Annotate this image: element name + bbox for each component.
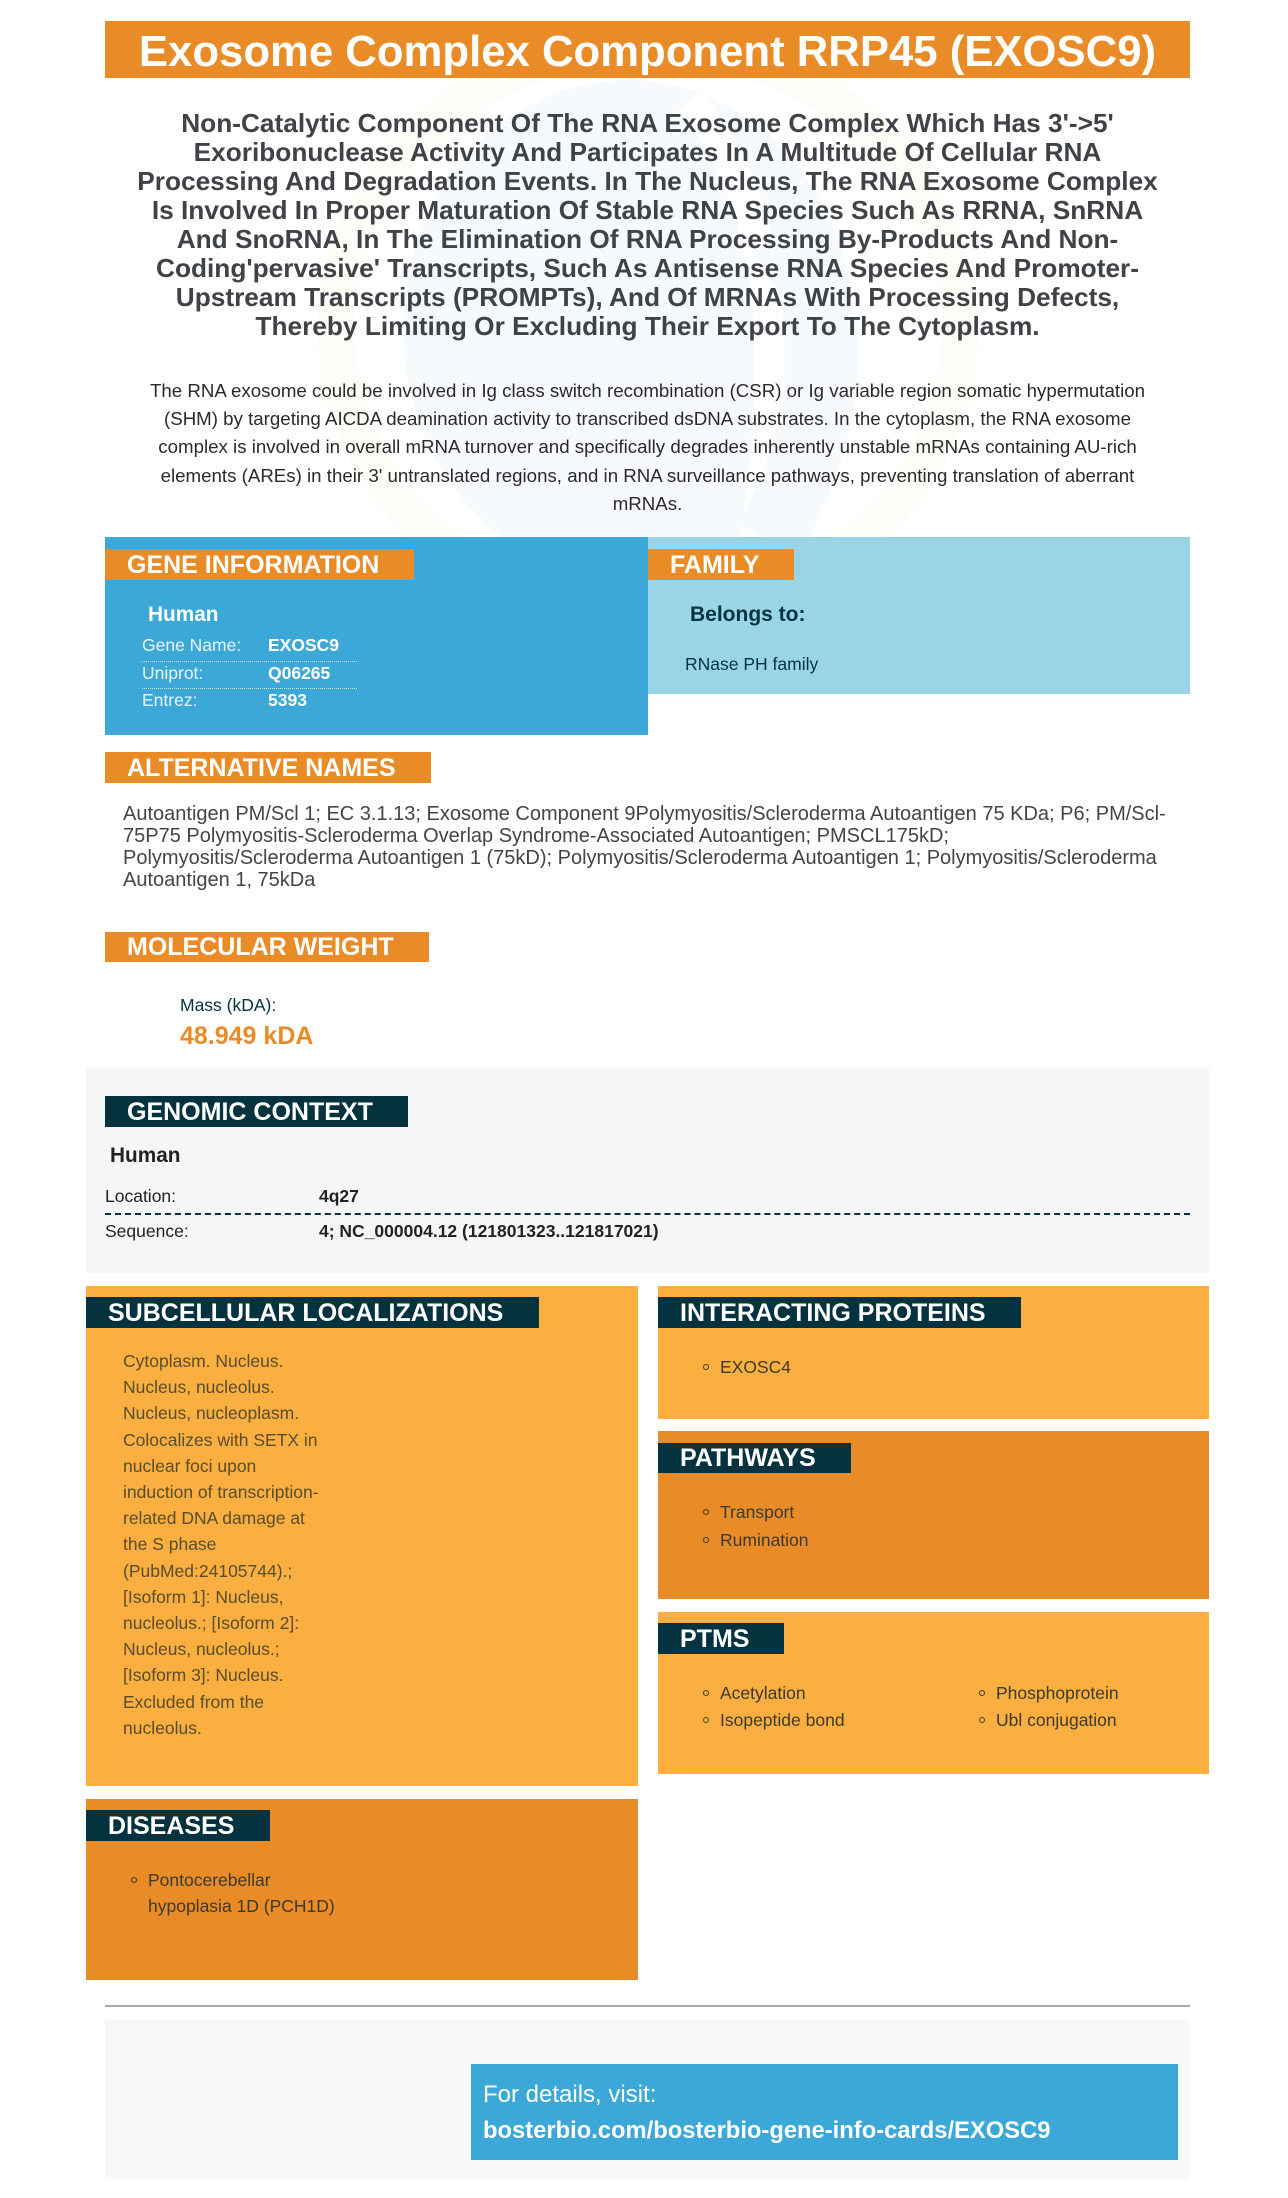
gene details table: Gene Name: xyxy=(142,635,241,655)
mass label: Mass (kDA): xyxy=(180,995,276,1015)
localization text: (PubMed:24105744).; xyxy=(123,1561,292,1581)
localization text: nuclear foci upon xyxy=(123,1456,256,1476)
footer rule xyxy=(105,2005,1190,2007)
sequence row xyxy=(105,1221,659,1241)
localization text: the S phase xyxy=(123,1534,216,1554)
alternative names text xyxy=(123,803,1166,891)
ptm item: ubl conjugation: Ubl conjugation xyxy=(996,1710,1117,1730)
sequence row: Sequence: xyxy=(105,1221,189,1241)
pathway item: rumination: Rumination xyxy=(720,1530,809,1550)
subtitle summary: Non-Catalytic Component Of The RNA Exosome Complex Which Has 3'->5' xyxy=(181,108,1114,138)
heading: family: FAMILY xyxy=(670,551,759,579)
description paragraph: The RNA exosome could be involved in Ig class switch recombination (CSR) or Ig variable region somatic hypermutation xyxy=(150,380,1145,401)
ptm item: phosphoprotein: Phosphoprotein xyxy=(996,1683,1119,1703)
alternative names text: 75P75 Polymyositis-Scleroderma Overlap Syndrome-Associated Autoantigen; PMSCL175kD; xyxy=(123,825,949,847)
panel: subcellular localizations xyxy=(86,1286,638,1786)
localization text: Excluded from the xyxy=(123,1692,264,1712)
panel: ptms xyxy=(658,1612,1209,1774)
dashed divider xyxy=(105,1213,1190,1215)
localization text: Nucleus, nucleolus.; xyxy=(123,1639,280,1659)
heading: subcellular localizations: SUBCELLULAR LOCALIZATIONS xyxy=(108,1299,503,1327)
subtitle summary: Upstream Transcripts (PROMPTs), And Of MRNAs With Processing Defects, xyxy=(176,282,1119,312)
localization text: [Isoform 3]: Nucleus. xyxy=(123,1665,283,1685)
localization text: Nucleus, nucleoplasm. xyxy=(123,1403,299,1423)
panel: pathways xyxy=(658,1431,1209,1599)
heading: diseases xyxy=(86,1810,270,1841)
subtitle summary: Processing And Degradation Events. In The Nucleus, The RNA Exosome Complex xyxy=(137,166,1158,196)
localization text: Colocalizes with SETX in xyxy=(123,1430,318,1450)
description paragraph: mRNAs. xyxy=(613,493,682,514)
localization text: nucleolus. xyxy=(123,1718,202,1738)
localization text: nucleolus.; [Isoform 2]: xyxy=(123,1613,299,1633)
alternative names text: Autoantigen 1, 75kDa xyxy=(123,869,315,891)
sequence row: 4; NC_000004.12 (121801323..121817021) xyxy=(319,1221,659,1241)
localization text: Cytoplasm. Nucleus. xyxy=(123,1351,283,1371)
callout label: For details, visit: xyxy=(483,2081,656,2108)
callout: details link xyxy=(471,2064,1178,2160)
subtitle summary xyxy=(137,108,1158,341)
localization text xyxy=(123,1351,319,1738)
heading: ptms: PTMS xyxy=(680,1625,749,1653)
heading: alternative names: ALTERNATIVE NAMES xyxy=(127,754,396,782)
pathway item: transport: Transport xyxy=(720,1502,794,1522)
panel: diseases xyxy=(86,1799,638,1980)
panel: family xyxy=(648,537,1190,694)
subtitle summary: Thereby Limiting Or Excluding Their Export To The Cytoplasm. xyxy=(255,311,1040,341)
mass value: 48.949 kDA xyxy=(180,1022,313,1050)
subtitle summary: And SnoRNA, In The Elimination Of RNA Processing By-Products And Non- xyxy=(177,224,1118,254)
heading: pathways: PATHWAYS xyxy=(680,1444,816,1472)
description paragraph: elements (AREs) in their 3' untranslated regions, and in RNA surveillance pathways, preventing translation of aberrant xyxy=(161,465,1134,486)
disease item: hypoplasia 1D (PCH1D) xyxy=(148,1896,335,1916)
subtitle summary: Coding'pervasive' Transcripts, Such As Antisense RNA Species And Promoter- xyxy=(156,253,1139,283)
heading: interacting proteins: INTERACTING PROTEINS xyxy=(680,1299,986,1327)
localization text: induction of transcription- xyxy=(123,1482,319,1502)
location row xyxy=(105,1186,359,1206)
heading: molecular weight: MOLECULAR WEIGHT xyxy=(127,933,394,961)
description paragraph: complex is involved in overall mRNA turnover and specifically degrades inherently unstable mRNAs containing AU-rich xyxy=(158,436,1137,457)
location row: Location: xyxy=(105,1186,176,1206)
protein list: EXOSC4 xyxy=(720,1357,791,1377)
heading: pathways xyxy=(658,1443,851,1473)
title banner: Exosome Complex Component RRP45 (EXOSC9) xyxy=(139,27,1156,76)
localization text: Nucleus, nucleolus. xyxy=(123,1377,275,1397)
heading: gene information: GENE INFORMATION xyxy=(127,551,379,579)
gene details table: Q06265 xyxy=(268,663,330,683)
location row: 4q27 xyxy=(319,1186,359,1206)
subtitle summary: Exoribonuclease Activity And Participates In A Multitude Of Cellular RNA xyxy=(194,137,1101,167)
species label: Human xyxy=(148,603,218,626)
panel: footer xyxy=(105,2020,1190,2179)
ptm item: acetylation: Acetylation xyxy=(720,1683,806,1703)
panel: interacting proteins xyxy=(658,1286,1209,1419)
heading: ptms xyxy=(658,1623,784,1654)
gene details table: EXOSC9 xyxy=(268,635,339,655)
family name: RNase PH family xyxy=(685,654,818,674)
panel: gene information xyxy=(105,537,648,735)
callout url: bosterbio.com/bosterbio-gene-info-cards/EXOSC9 xyxy=(483,2117,1050,2144)
description paragraph xyxy=(150,380,1145,514)
gene details table: Uniprot: xyxy=(142,663,203,683)
gene details table: Entrez: xyxy=(142,690,197,710)
disease item: Pontocerebellar xyxy=(148,1870,271,1890)
belongs to label: Belongs to: xyxy=(690,603,806,626)
species label: Human xyxy=(110,1144,180,1167)
background watermark logo xyxy=(318,78,978,537)
localization text: [Isoform 1]: Nucleus, xyxy=(123,1587,283,1607)
subtitle summary: Is Involved In Proper Maturation Of Stable RNA Species Such As RRNA, SnRNA xyxy=(152,195,1143,225)
localization text: related DNA damage at xyxy=(123,1508,305,1528)
alternative names text: Autoantigen PM/Scl 1; EC 3.1.13; Exosome Component 9Polymyositis/Scleroderma Autoantigen 75 KDa; P6; PM/Scl- xyxy=(123,803,1166,825)
heading: diseases: DISEASES xyxy=(108,1812,234,1840)
disease item xyxy=(148,1867,335,1919)
gene details table xyxy=(142,635,357,710)
description paragraph: (SHM) by targeting AICDA deamination activity to transcribed dsDNA substrates. In the cytoplasm, the RNA exosome xyxy=(164,408,1131,429)
ptm item: isopeptide bond: Isopeptide bond xyxy=(720,1710,845,1730)
panel: genomic context xyxy=(86,1067,1209,1273)
alternative names text: Polymyositis/Scleroderma Autoantigen 1 (75kD); Polymyositis/Scleroderma Autoantigen 1; Polymyositis/Scleroderma xyxy=(123,847,1157,869)
gene details table: 5393 xyxy=(268,690,307,710)
heading: genomic context: GENOMIC CONTEXT xyxy=(127,1098,373,1126)
heading: family xyxy=(648,549,794,580)
